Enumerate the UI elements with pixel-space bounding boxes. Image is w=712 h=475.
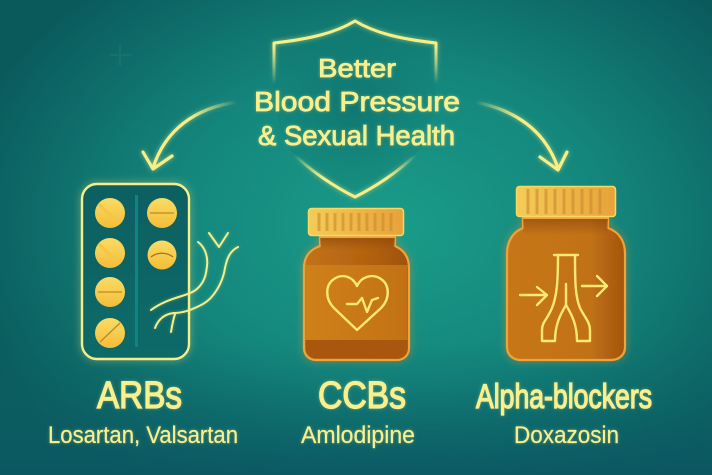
panel: alpha-blocker bottle [507, 186, 625, 360]
label: Alpha-blockers: Doxazosin [514, 422, 619, 449]
label: ARBs [48, 375, 238, 449]
bottle body [507, 218, 625, 360]
bottle cap [308, 208, 404, 236]
icon: pills [95, 198, 177, 348]
shield outline [274, 21, 436, 197]
label: CCBs [301, 375, 415, 449]
title [254, 53, 460, 151]
icon: dilating vessel with arrows [520, 255, 607, 341]
bottle cap [516, 186, 616, 217]
label: ARBs: Losartan, Valsartan [48, 422, 238, 449]
label: Alpha-blockers [476, 378, 652, 449]
arrow: right [475, 102, 567, 170]
label: CCBs: CCBs [318, 375, 406, 417]
panel: CCB bottle [304, 208, 409, 360]
bottle body [304, 237, 409, 360]
title: Better [318, 53, 396, 83]
label: Alpha-blockers: Alpha-blockers [476, 378, 652, 416]
title: & Sexual Health [258, 120, 455, 151]
icon: blood vessel [151, 233, 238, 332]
label: CCBs: Amlodipine [301, 422, 415, 449]
arrow: left [143, 102, 237, 169]
panel: blister pack [82, 184, 189, 359]
title: Blood Pressure [254, 86, 460, 117]
label: ARBs: ARBs [97, 375, 182, 417]
icon: heart with pulse [327, 276, 388, 330]
